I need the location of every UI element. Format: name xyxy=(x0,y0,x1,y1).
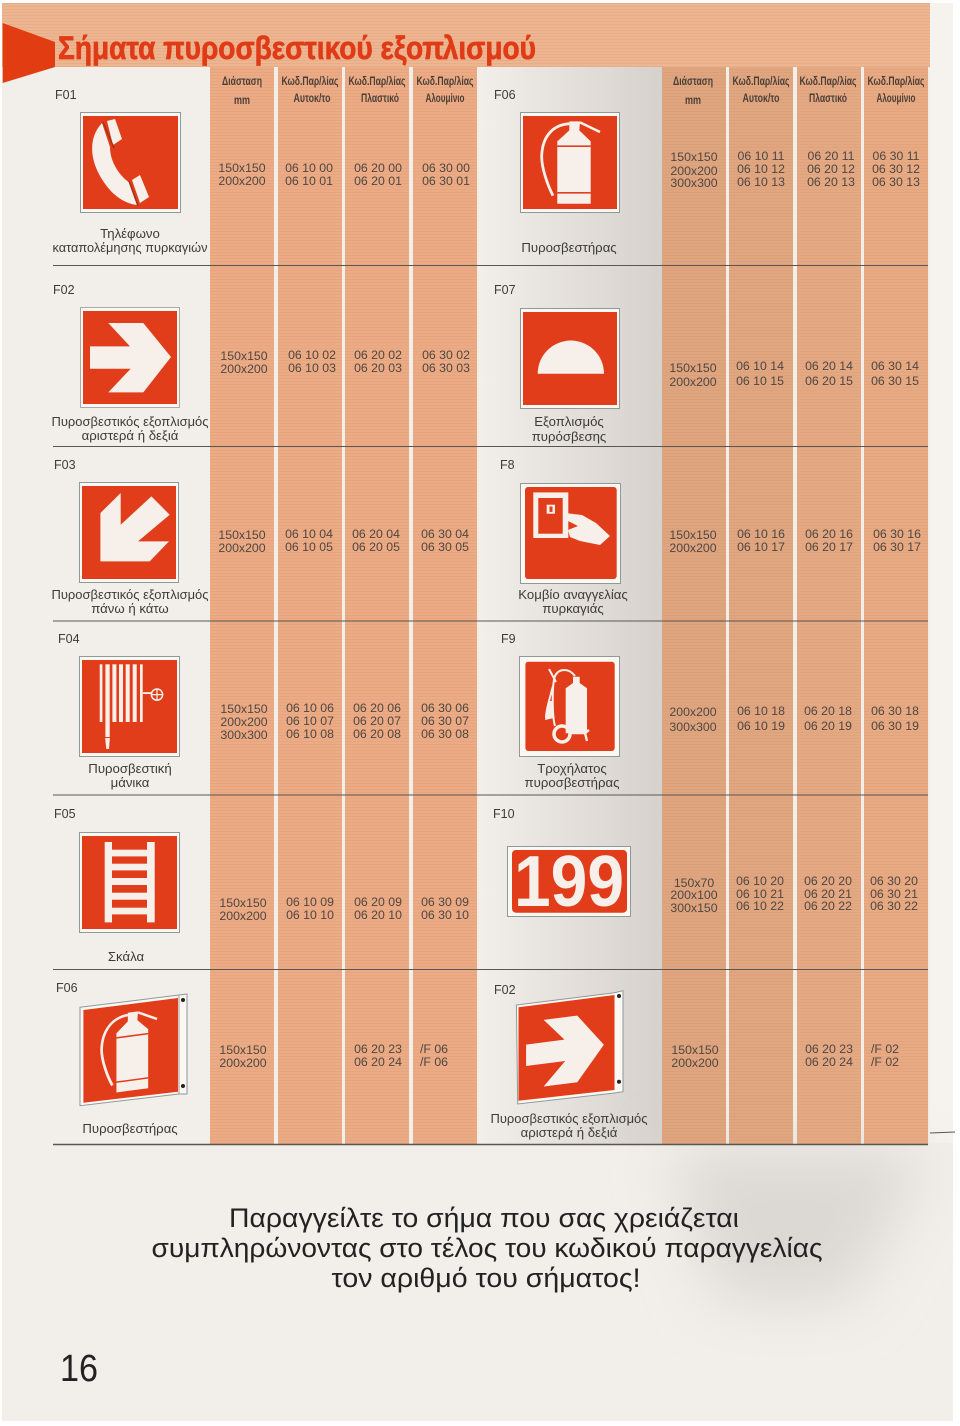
table header: right: Διάσταση xyxy=(673,74,713,88)
data row F8: 06 20 17 xyxy=(805,540,853,554)
data row F06 wall mounted: 06 20 23 xyxy=(354,1042,402,1056)
title: Σήματα πυροσβεστικού εξοπλισμού xyxy=(58,30,536,66)
table header: left: Κωδ.Παρ/λίας xyxy=(416,74,474,88)
captions: Τροχήλατος xyxy=(537,761,607,776)
order note xyxy=(152,1203,822,1293)
data row F06 wall mounted: 200x200 xyxy=(219,1056,267,1070)
data row F10: 06 10 20 xyxy=(736,874,784,888)
table header: left: Πλαστικό xyxy=(361,91,399,105)
data row F06: 06 10 12 xyxy=(737,162,785,176)
data row F06: 06 20 13 xyxy=(807,175,855,189)
data row F10: 06 20 22 xyxy=(804,899,852,913)
data row F03: 06 20 04 xyxy=(352,527,400,541)
data row F04: 06 30 07 xyxy=(421,714,469,728)
data row F02: 200x200 xyxy=(220,362,268,376)
data row F06: 06 10 11 xyxy=(738,149,785,163)
captions: αριστερά ή δεξιά xyxy=(521,1125,618,1140)
table header: left: mm xyxy=(234,93,250,107)
data row F10: 150x70 xyxy=(674,876,714,890)
sign F04: fire hose xyxy=(80,656,180,756)
data row F06: 06 30 13 xyxy=(872,175,920,189)
data row F03: 06 10 04 xyxy=(285,527,333,541)
data row F05: 06 10 10 xyxy=(286,908,334,922)
data row F06: 06 10 13 xyxy=(737,175,785,189)
data row F8: 06 20 16 xyxy=(805,527,853,541)
order note: συμπληρώνοντας στο τέλος του κωδικού παραγγελίας xyxy=(152,1233,822,1263)
sign F06: fire extinguisher xyxy=(520,112,620,212)
data row F01: 06 20 01 xyxy=(354,174,402,188)
code labels: F06 xyxy=(494,88,516,102)
code labels: F02 xyxy=(53,283,75,297)
data row F03: 06 10 05 xyxy=(285,540,333,554)
data row F01: 06 30 01 xyxy=(422,174,470,188)
data row F02 wall mounted: 200x200 xyxy=(671,1056,719,1070)
data row F07: 150x150 xyxy=(669,361,717,375)
captions: Πυροσβεστικός εξοπλισμός xyxy=(490,1111,648,1126)
data row F10: 06 30 20 xyxy=(870,874,918,888)
data row F10: 06 10 22 xyxy=(736,899,784,913)
data row F07: 06 10 15 xyxy=(736,374,784,388)
code labels: F07 xyxy=(494,283,516,297)
data row F06: 200x200 xyxy=(670,164,718,178)
data row F07: 06 30 15 xyxy=(871,374,919,388)
data row F06 wall mounted: /F 06 xyxy=(420,1042,448,1056)
data row F07: 200x200 xyxy=(669,375,717,389)
price table column stripes xyxy=(210,67,928,1144)
code labels: F04 xyxy=(58,632,80,646)
data row F05: 06 20 10 xyxy=(354,908,402,922)
table header: right: Αλουμίνιο xyxy=(876,91,916,105)
data row F02: 06 30 03 xyxy=(422,361,470,375)
data row F02 xyxy=(220,348,470,376)
data row F03: 200x200 xyxy=(218,541,266,555)
data row F07: 06 20 14 xyxy=(805,359,853,373)
table header: right: Πλαστικό xyxy=(809,91,847,105)
data row F10: 200x100 xyxy=(670,888,718,902)
captions: Πυροσβεστικός εξοπλισμός xyxy=(52,414,208,429)
data row F04: 150x150 xyxy=(220,702,268,716)
data row F10: 06 10 21 xyxy=(736,887,784,901)
sign F05: ladder xyxy=(80,832,180,932)
captions: αριστερά ή δεξιά xyxy=(82,428,179,443)
code labels: F8 xyxy=(500,458,515,472)
data row F06: 06 30 12 xyxy=(872,162,920,176)
data row F06: 06 20 12 xyxy=(807,162,855,176)
data row F10: 06 20 20 xyxy=(804,874,852,888)
data row F03 xyxy=(218,527,469,555)
page number: 16 xyxy=(60,1348,98,1390)
data row F02 wall mounted: 150x150 xyxy=(671,1043,719,1057)
data row F05: 06 30 09 xyxy=(421,895,469,909)
data row F04: 200x200 xyxy=(220,715,268,729)
code labels: F05 xyxy=(54,807,76,821)
data row F06 wall mounted: 06 20 24 xyxy=(354,1055,402,1069)
data row F05 xyxy=(219,895,469,923)
data row F06 wall mounted: 150x150 xyxy=(219,1043,267,1057)
data row F06: 300x300 xyxy=(670,176,718,190)
data row F05: 06 20 09 xyxy=(354,895,402,909)
captions: πάνω ή κάτω xyxy=(91,601,169,616)
data row F9: 06 30 18 xyxy=(871,704,919,718)
title band xyxy=(2,3,930,67)
data row F02 wall mounted: 06 20 23 xyxy=(805,1042,853,1056)
data row F02: 150x150 xyxy=(220,349,268,363)
data row F01: 06 10 00 xyxy=(285,161,333,175)
data row F04: 06 10 06 xyxy=(286,701,334,715)
code labels: F02 xyxy=(494,983,516,997)
data row F9: 06 10 18 xyxy=(737,704,785,718)
captions: μάνικα xyxy=(111,775,150,790)
data row F02: 06 30 02 xyxy=(422,348,470,362)
code labels: F03 xyxy=(54,458,76,472)
data row F03: 06 30 05 xyxy=(421,540,469,554)
sign F8: fire alarm button xyxy=(520,484,620,584)
captions: Πυροσβεστήρας xyxy=(82,1121,178,1136)
table header: right: Κωδ.Παρ/λίας xyxy=(732,74,790,88)
table header: left: Διάσταση xyxy=(222,74,262,88)
code labels xyxy=(53,88,516,997)
data row F05: 06 10 09 xyxy=(286,895,334,909)
captions: καταπολέμησης πυρκαγιών xyxy=(52,240,208,255)
data row F06: 150x150 xyxy=(670,150,718,164)
data row F05: 150x150 xyxy=(219,896,267,910)
data row F01 xyxy=(218,161,470,188)
data row F02 wall mounted: 06 20 24 xyxy=(805,1055,853,1069)
table header: right: Αυτοκ/το xyxy=(742,91,780,105)
table header: left: Αλουμίνιο xyxy=(426,91,464,105)
sign F06 wall mounted: extinguisher xyxy=(80,994,187,1106)
data row F02: 06 10 02 xyxy=(288,348,336,362)
data row F02: 06 20 02 xyxy=(354,348,402,362)
data row F8: 06 30 16 xyxy=(873,527,921,541)
data row F05: 200x200 xyxy=(219,909,267,923)
title marker: red arrow xyxy=(3,23,55,83)
code labels: F10 xyxy=(493,807,515,821)
captions: πυροσβεστήρας xyxy=(525,775,619,790)
table header: right xyxy=(673,74,924,107)
captions: Πυροσβεστικός εξοπλισμός xyxy=(52,587,208,602)
data row F02 wall mounted xyxy=(671,1042,899,1070)
order note: Παραγγείλτε το σήμα που σας χρειάζεται xyxy=(229,1203,739,1233)
data row F8: 06 30 17 xyxy=(873,540,921,554)
data row F06: 06 30 11 xyxy=(873,149,920,163)
sign F02: right arrow xyxy=(80,308,180,408)
table header: right: Κωδ.Παρ/λίας xyxy=(800,74,856,88)
data row F8: 06 10 16 xyxy=(737,527,785,541)
table header: right: mm xyxy=(685,93,701,107)
data row F03: 06 20 05 xyxy=(352,540,400,554)
data row F9: 06 20 19 xyxy=(804,719,852,733)
data row F10: 300x150 xyxy=(670,901,718,915)
data row F01: 06 30 00 xyxy=(422,161,470,175)
captions: Τηλέφωνο xyxy=(100,226,160,241)
data row F02: 06 10 03 xyxy=(288,361,336,375)
captions: Κομβίο αναγγελίας xyxy=(518,587,628,602)
data row F04 xyxy=(220,701,469,742)
table header: left: Αυτοκ/το xyxy=(294,91,330,105)
data row F01: 06 20 00 xyxy=(354,161,402,175)
data row F02: 06 20 03 xyxy=(354,361,402,375)
data row F07: 06 20 15 xyxy=(805,374,853,388)
data row F01: 200x200 xyxy=(218,174,266,188)
data row F04: 06 20 07 xyxy=(353,714,401,728)
captions: Σκάλα xyxy=(108,949,144,964)
data row F06 xyxy=(670,149,920,190)
data row F9: 300x300 xyxy=(669,720,717,734)
data row F04: 06 20 08 xyxy=(353,727,401,741)
data row F02 wall mounted: /F 02 xyxy=(871,1055,899,1069)
data row F8: 06 10 17 xyxy=(737,540,785,554)
captions xyxy=(52,226,648,1140)
code labels: F9 xyxy=(501,632,516,646)
code labels: F01 xyxy=(55,88,77,102)
data row F06 wall mounted: /F 06 xyxy=(420,1055,448,1069)
data row F04: 06 20 06 xyxy=(353,701,401,715)
captions: πυρκαγιάς xyxy=(542,601,604,616)
sign F9: wheeled extinguisher xyxy=(520,656,620,756)
code labels: F06 xyxy=(56,981,78,995)
row dividers xyxy=(53,266,955,1144)
captions: Πυροσβεστική xyxy=(88,761,172,776)
data row F8: 150x150 xyxy=(669,528,717,542)
data row F01: 06 10 01 xyxy=(285,174,333,188)
data row F10: 06 30 21 xyxy=(870,887,918,901)
data row F9 xyxy=(669,704,919,734)
table header: right: Κωδ.Παρ/λίας xyxy=(868,74,924,88)
captions: πυρόσβεσης xyxy=(532,429,606,444)
data row F03: 150x150 xyxy=(218,528,266,542)
data row F8: 200x200 xyxy=(669,541,717,555)
data row F06 wall mounted xyxy=(219,1042,448,1070)
data row F8 xyxy=(669,527,921,555)
data row F05: 06 30 10 xyxy=(421,908,469,922)
data row F02 wall mounted: /F 02 xyxy=(871,1042,899,1056)
sign F02 wall mounted: arrow xyxy=(516,991,623,1104)
data row F10: 06 30 22 xyxy=(870,899,918,913)
data row F07: 06 30 14 xyxy=(871,359,919,373)
order note: τον αριθμό του σήματος! xyxy=(332,1263,640,1293)
data row F10 xyxy=(670,874,918,915)
data row F04: 300x300 xyxy=(220,728,268,742)
table header: left: Κωδ.Παρ/λίας xyxy=(282,74,338,88)
data row F03: 06 30 04 xyxy=(421,527,469,541)
data row F01: 150x150 xyxy=(218,161,266,175)
data row F10: 06 20 21 xyxy=(804,887,852,901)
sign F07: semicircle xyxy=(520,308,620,408)
captions: Εξοπλισμός xyxy=(534,414,604,429)
sign F03: diagonal arrow xyxy=(80,482,178,582)
table header: left: Κωδ.Παρ/λίας xyxy=(348,74,406,88)
data row F06: 06 20 11 xyxy=(808,149,855,163)
table header: left xyxy=(222,74,474,107)
data row F9: 06 30 19 xyxy=(871,719,919,733)
sign F10: 199: 199 xyxy=(514,842,624,922)
data row F9: 06 10 19 xyxy=(737,719,785,733)
data row F07 xyxy=(669,359,919,389)
data row F04: 06 10 07 xyxy=(286,714,334,728)
data row F07: 06 10 14 xyxy=(736,359,784,373)
sign F01: telephone xyxy=(80,112,180,212)
data row F9: 200x200 xyxy=(669,705,717,719)
data row F04: 06 10 08 xyxy=(286,727,334,741)
data row F04: 06 30 06 xyxy=(421,701,469,715)
captions: Πυροσβεστήρας xyxy=(521,240,617,255)
data row F9: 06 20 18 xyxy=(804,704,852,718)
data row F04: 06 30 08 xyxy=(421,727,469,741)
